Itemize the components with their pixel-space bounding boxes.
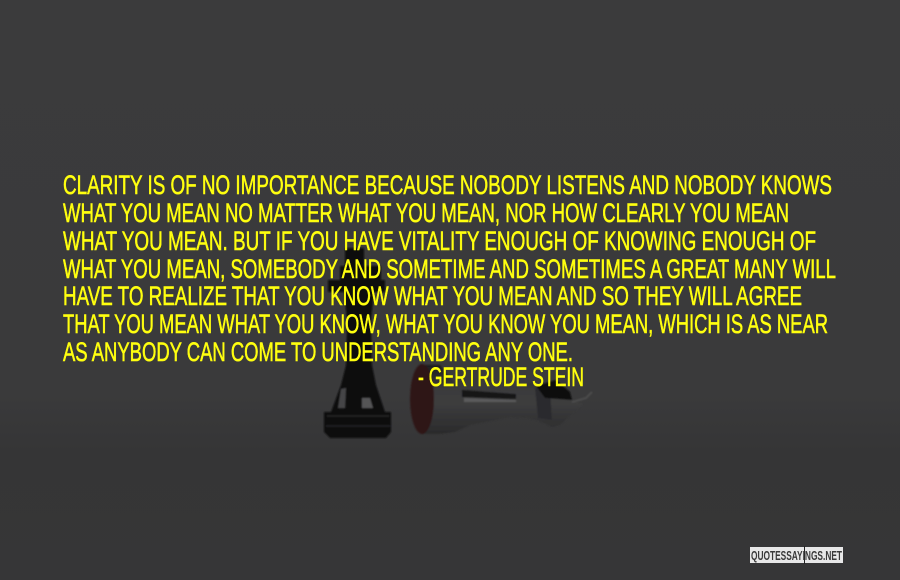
fallen chess piece [410,364,592,434]
standing chess piece [324,248,391,438]
line 7: AS ANYBODY CAN COME TO UNDERSTANDING ANY ONE. [63,337,573,367]
attribution: - GERTRUDE STEIN [418,362,584,392]
red felt base [410,364,434,434]
watermark [750,546,843,564]
quote text [63,170,836,392]
watermark: QUOTESSAYINGS.NET [751,548,842,563]
